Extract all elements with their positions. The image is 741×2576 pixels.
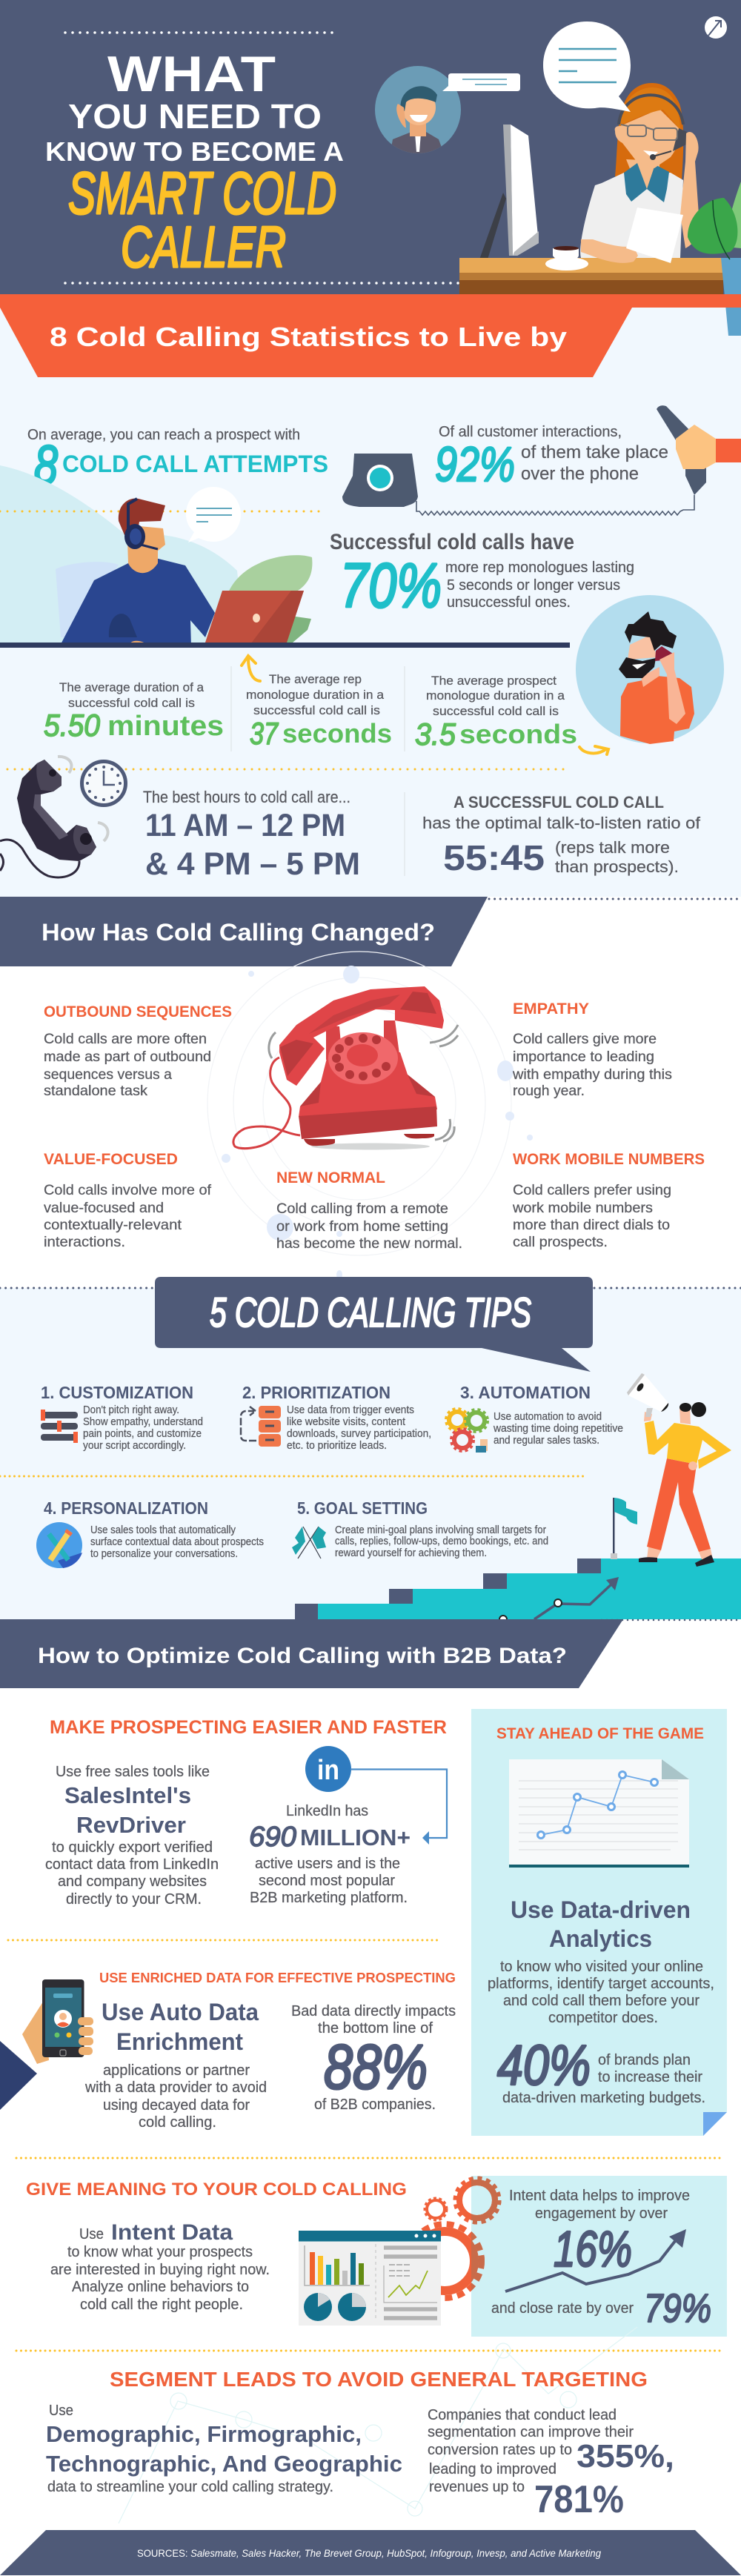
panel: orange heading banner	[0, 294, 741, 377]
panel: stay ahead of the game: and cold call them before your	[503, 1993, 700, 2009]
panel: optimize with B2B data heading	[0, 1619, 623, 1688]
panel: intent data stats: 16%	[554, 2221, 632, 2277]
panel: tip personalization: to personalize your conversations.	[90, 1547, 238, 1560]
panel: empathy: Cold callers give more	[513, 1032, 657, 1047]
panel: rep monologue duration	[246, 672, 392, 751]
panel: intent data stats	[471, 2176, 727, 2337]
panel: stay ahead of the game: to know who visited your online	[500, 1959, 703, 1975]
panel: value-focused	[44, 1151, 212, 1250]
heading: segment leads: SEGMENT LEADS TO AVOID GENERAL TARGETING	[110, 2368, 648, 2391]
icon: black handset with cord	[0, 757, 108, 877]
icon: tools circle	[36, 1522, 82, 1568]
panel: tip customization: 1. CUSTOMIZATION	[41, 1383, 193, 1402]
panel: tip goal setting: 5. GOAL SETTING	[297, 1498, 428, 1518]
panel: empathy: importance to leading	[513, 1049, 654, 1065]
panel: outbound sequences: made as part of outbound	[44, 1049, 211, 1065]
panel: work mobile numbers: WORK MOBILE NUMBERS	[513, 1151, 705, 1168]
panel: statistic 92 percent	[435, 424, 668, 491]
text block: linkedin stat	[249, 1803, 411, 1906]
text block: revdriver: to quickly export verified	[52, 1839, 213, 1856]
panel: new normal: or work from home setting	[276, 1219, 448, 1235]
text block: bad data stat: 88%	[324, 2032, 428, 2102]
arrow: yellow up arrow	[242, 656, 260, 681]
panel: empathy: EMPATHY	[513, 1000, 589, 1018]
decorative desk line	[0, 643, 570, 648]
panel: stay ahead of the game: platforms, identify target accounts,	[488, 1976, 714, 1992]
panel: stay ahead of the game: Analytics	[549, 1925, 652, 1952]
panel: stay ahead of the game: Use Data-driven	[511, 1896, 691, 1923]
text block: segmentation types: data to streamline your cold calling strategy.	[47, 2479, 333, 2495]
text block: bad data stat	[291, 2003, 456, 2113]
panel: empathy	[512, 1000, 672, 1099]
panel: tip customization	[41, 1383, 203, 1452]
panel: tip personalization: Use sales tools that automatically	[90, 1524, 236, 1536]
panel: tip prioritization: etc. to prioritize leads.	[287, 1439, 387, 1452]
panel: rep monologue duration: The average rep	[269, 672, 362, 686]
panel: talk-to-listen ratio: (reps talk more	[555, 838, 670, 857]
panel: statistic 70 percent: 5 seconds or longer versus	[447, 577, 620, 594]
panel: best hours: & 4 PM – 5 PM	[145, 846, 360, 882]
text block: use auto data enrichment: applications or partner	[103, 2062, 250, 2079]
panel: value-focused: VALUE-FOCUSED	[44, 1151, 178, 1168]
panel: statistic reach prospect: COLD CALL ATTEMPTS	[62, 451, 328, 477]
chart: dashboard	[299, 2231, 441, 2326]
panel: statistic 70 percent	[330, 530, 634, 620]
title: KNOW TO BECOME A	[45, 136, 344, 167]
text block: use auto data enrichment: with a data provider to avoid	[84, 2079, 267, 2096]
panel: outbound sequences	[44, 1003, 232, 1099]
arrow: rising line	[505, 2229, 686, 2291]
panel: tip prioritization: Use data from trigger events	[287, 1404, 414, 1416]
text block: use auto data enrichment: USE ENRICHED DATA FOR EFFECTIVE PROSPECTING	[99, 1970, 456, 1985]
text block: use intent data: cold call the right people.	[80, 2297, 243, 2313]
text block: revdriver: contact data from LinkedIn	[45, 1856, 219, 1873]
text block: revdriver	[45, 1764, 219, 1908]
panel: value-focused: contextually-relevant	[44, 1218, 182, 1233]
text block: linkedin stat: second most popular	[259, 1873, 395, 1889]
icon: man with headset at laptop	[0, 465, 322, 647]
panel: rep monologue duration: 37	[250, 716, 279, 751]
panel: outbound sequences: OUTBOUND SEQUENCES	[44, 1003, 232, 1020]
panel: average call duration: 5.50	[44, 708, 101, 743]
panel: footer sources	[0, 2530, 741, 2575]
arrow: linkedin connector	[350, 1770, 447, 1845]
panel: work mobile numbers: work mobile numbers	[512, 1201, 653, 1216]
icon: potted plant	[688, 182, 741, 336]
text block: use intent data: to know what your prospects	[67, 2244, 253, 2260]
panel: work mobile numbers	[512, 1151, 705, 1250]
icon: gears	[446, 1409, 488, 1453]
text block: segmentation types	[46, 2403, 402, 2495]
icon: hand holding handset	[657, 405, 741, 495]
panel: statistic 92 percent: of them take place	[521, 442, 668, 462]
icon: woman with headset	[580, 83, 699, 263]
icon: crossed flags	[292, 1527, 326, 1558]
title: YOU NEED TO	[68, 97, 322, 136]
panel: statistic 70 percent: unsuccessful ones.	[447, 594, 571, 611]
panel: tip customization: Show empathy, understand	[83, 1415, 203, 1428]
panel: tip prioritization: like website visits, content	[287, 1415, 406, 1428]
panel: value-focused: value-focused and	[44, 1201, 164, 1216]
panel: average call duration: successful cold call is	[68, 696, 195, 710]
panel: tip personalization: 4. PERSONALIZATION	[44, 1498, 208, 1518]
text block: use intent data: Intent Data	[111, 2220, 233, 2245]
panel: tip automation	[460, 1383, 623, 1447]
text block: use auto data enrichment: Use Auto Data	[102, 1999, 259, 2025]
panel: best hours: The best hours to cold call are...	[143, 788, 350, 806]
panel: prospect monologue duration: monologue duration in a	[426, 688, 565, 703]
text block: use auto data enrichment: cold calling.	[139, 2114, 216, 2131]
text block: linkedin stat: active users and is the	[255, 1856, 400, 1872]
panel: statistic 70 percent: Successful cold calls have	[330, 530, 574, 554]
panel: prospect monologue duration: successful cold call is	[433, 704, 559, 718]
panel: statistic reach prospect	[27, 427, 328, 496]
panel: intent data stats: engagement by over	[535, 2205, 668, 2222]
panel: optimize with B2B data heading: How to Optimize Cold Calling with B2B Data?	[38, 1644, 567, 1668]
text block: segmentation stats: revenues up to	[429, 2479, 525, 2495]
icon: linkedin: in	[317, 1755, 339, 1786]
text block: revdriver: directly to your CRM.	[66, 1891, 202, 1908]
panel: prospect monologue duration: 3.5	[415, 717, 456, 751]
panel: rep monologue duration: successful cold call is	[253, 703, 380, 717]
panel: stay ahead of the game: 40%	[497, 2034, 591, 2097]
panel: stay ahead of the game: competitor does.	[548, 2010, 658, 2026]
panel: new normal	[276, 1169, 462, 1252]
icon: flag	[611, 1498, 637, 1559]
panel: empathy: with empathy during this	[512, 1067, 672, 1083]
panel: new normal: has become the new normal.	[276, 1236, 462, 1252]
icon: orange gears	[408, 2178, 499, 2298]
icon: woman with megaphone	[627, 1373, 731, 1567]
panel: tip goal setting	[297, 1498, 548, 1559]
panel: statistic 70 percent: more rep monologues lasting	[445, 560, 634, 576]
callout: 5 cold calling tips heading: 5 COLD CALLING TIPS	[210, 1289, 531, 1335]
panel: how has cold calling changed heading: How Has Cold Calling Changed?	[41, 919, 435, 946]
panel: empathy: rough year.	[513, 1083, 585, 1099]
panel: intent data stats: Intent data helps to improve	[509, 2188, 690, 2204]
panel: average call duration: The average duration of a	[59, 680, 205, 694]
panel: rep monologue duration: monologue duration in a	[246, 688, 385, 702]
text block: linkedin stat: LinkedIn has	[286, 1803, 368, 1819]
text block: revdriver: Use free sales tools like	[56, 1764, 210, 1780]
panel: intent data stats: 79%	[644, 2286, 711, 2331]
panel: tip customization: your script accordingly.	[83, 1439, 186, 1452]
panel: tip customization: Don't pitch right away.	[83, 1404, 179, 1416]
text block: use intent data: Use	[79, 2226, 104, 2243]
icon: coffee cup	[545, 246, 588, 270]
text block: segmentation types: Use	[49, 2403, 73, 2419]
panel: prospect monologue duration: The average prospect	[431, 674, 556, 688]
panel: tip automation: 3. AUTOMATION	[460, 1383, 591, 1402]
heading: give meaning: GIVE MEANING TO YOUR COLD CALLING	[26, 2180, 407, 2200]
title: WHAT	[107, 46, 276, 102]
panel: new normal: Cold calling from a remote	[276, 1201, 448, 1217]
panel: average call duration: minutes	[107, 711, 224, 742]
text block: use intent data: are interested in buying right now.	[50, 2262, 270, 2278]
panel: stay ahead of the game: to increase their	[598, 2069, 702, 2085]
panel: tip prioritization	[242, 1383, 431, 1452]
panel: header background	[0, 0, 741, 294]
panel: talk-to-listen ratio: A SUCCESSFUL COLD CALL	[453, 793, 664, 811]
panel: tip goal setting: reward yourself for achieving them.	[335, 1547, 487, 1559]
panel: tip prioritization: downloads, survey participation,	[287, 1427, 431, 1440]
panel: outbound sequences: Cold calls are more often	[44, 1032, 207, 1047]
text block: use auto data enrichment: Enrichment	[116, 2028, 243, 2055]
panel: tip customization: pain points, and customize	[83, 1427, 202, 1440]
panel: tip personalization: surface contextual data about prospects	[90, 1536, 264, 1548]
panel: statistic 92 percent: over the phone	[521, 464, 639, 484]
panel: tip goal setting: calls, replies, follow-ups, demo bookings, etc. and	[335, 1535, 548, 1547]
callout: speech bubble laptop man	[186, 487, 241, 542]
panel: new normal: NEW NORMAL	[276, 1169, 385, 1186]
chart: line on paper	[509, 1759, 689, 1868]
panel: tip automation: wasting time doing repetitive	[493, 1422, 623, 1435]
text block: segmentation types: Demographic, Firmographic,	[46, 2421, 362, 2447]
panel: talk-to-listen ratio: has the optimal talk-to-listen ratio of	[422, 814, 701, 832]
panel: statistic 92 percent: 92%	[435, 436, 515, 491]
text block: segmentation stats: 355%,	[576, 2438, 674, 2474]
panel: prospect monologue duration	[415, 674, 577, 751]
panel: stay ahead of the game: STAY AHEAD OF THE GAME	[496, 1725, 704, 1742]
panel: tip automation: Use automation to avoid	[494, 1410, 602, 1423]
panel: outbound sequences: sequences versus a	[44, 1067, 172, 1083]
icon: bearded man on phone	[576, 595, 724, 744]
icon: office telephone with cord	[342, 454, 694, 515]
icon: clock	[82, 762, 126, 805]
text block: revdriver: RevDriver	[76, 1812, 186, 1838]
icon: computer monitor	[479, 125, 539, 270]
icon: man on phone avatar	[375, 66, 461, 156]
text block: segmentation stats: segmentation can improve their	[428, 2424, 634, 2440]
icon: priority list	[241, 1406, 281, 1447]
text block: segmentation stats	[428, 2407, 674, 2521]
title	[45, 46, 344, 279]
icon: stairs with rising chart	[295, 1558, 741, 1623]
icon: red rotary telephone	[233, 986, 458, 1150]
title: CALLER	[121, 214, 286, 279]
panel: stay ahead of the game	[471, 1709, 727, 2136]
panel: work mobile numbers: call prospects.	[513, 1235, 608, 1250]
text block: linkedin stat: B2B marketing platform.	[250, 1890, 408, 1906]
text block: revdriver: and company websites	[58, 1873, 207, 1890]
panel: statistic reach prospect: On average, you can reach a prospect with	[27, 427, 300, 443]
panel: tip automation: and regular sales tasks.	[494, 1434, 599, 1447]
panel: footer sources: SOURCES: Salesmate, Sales Hacker, The Brevet Group, HubSpot, Infogroup, Invesp, and Active Marketing	[137, 2547, 601, 2559]
panel: tip personalization	[44, 1498, 264, 1560]
panel: work mobile numbers: more than direct dials to	[513, 1218, 670, 1233]
panel: work mobile numbers: Cold callers prefer using	[513, 1183, 671, 1198]
panel: prospect monologue duration: seconds	[459, 719, 577, 749]
text block: segmentation stats: 781%	[534, 2478, 624, 2521]
text block: use intent data: Analyze online behaviors to	[72, 2279, 249, 2295]
panel: value-focused: interactions.	[44, 1235, 125, 1250]
panel: rep monologue duration: seconds	[282, 718, 392, 748]
icon: hand holding smartphone	[0, 1979, 93, 2110]
heading: make prospecting easier: MAKE PROSPECTING EASIER AND FASTER	[50, 1717, 447, 1738]
text block: bad data stat: the bottom line of	[318, 2020, 433, 2036]
panel: how has cold calling changed heading	[0, 897, 488, 966]
callout: small speech bubble	[442, 73, 520, 91]
text block: segmentation stats: conversion rates up to	[428, 2442, 572, 2458]
arrow: yellow right arrow	[579, 746, 608, 754]
panel: best hours	[143, 788, 360, 882]
callout: big speech bubble	[543, 21, 631, 112]
callout: 5 cold calling tips heading	[155, 1277, 593, 1372]
panel: outbound sequences: standalone task	[44, 1083, 148, 1099]
icon: sliders	[41, 1410, 78, 1443]
text block: bad data stat: Bad data directly impacts	[291, 2003, 456, 2019]
text block: segmentation stats: Companies that conduct lead	[428, 2407, 617, 2423]
icon: desk	[459, 258, 723, 294]
panel: talk-to-listen ratio: than prospects).	[555, 857, 679, 876]
panel: tip prioritization: 2. PRIORITIZATION	[242, 1383, 391, 1402]
panel: stay ahead of the game: data-driven marketing budgets.	[502, 2090, 705, 2106]
panel: intent data stats: and close rate by over	[491, 2300, 634, 2317]
panel: stay ahead of the game: of brands plan	[598, 2052, 691, 2068]
title: SMART COLD	[68, 160, 336, 226]
panel: statistic reach prospect: 8	[34, 434, 58, 496]
panel: best hours: 11 AM – 12 PM	[145, 808, 345, 843]
panel: statistic 92 percent: Of all customer interactions,	[439, 424, 622, 440]
text block: use auto data enrichment	[84, 1970, 456, 2131]
text block: use intent data	[50, 2220, 270, 2313]
panel: talk-to-listen ratio: 55:45	[443, 839, 545, 878]
panel: average call duration	[44, 680, 224, 743]
panel: value-focused: Cold calls involve more of	[44, 1183, 212, 1198]
text block: bad data stat: of B2B companies.	[314, 2097, 436, 2113]
panel: orange heading banner: 8 Cold Calling Statistics to Live by	[50, 322, 567, 352]
panel: tip goal setting: Create mini-goal plans involving small targets for	[335, 1524, 546, 1536]
panel: statistic 70 percent: 70%	[340, 551, 442, 620]
text block: linkedin stat: 690	[249, 1822, 296, 1853]
panel: talk-to-listen ratio	[422, 793, 701, 878]
icon: logo	[705, 16, 727, 39]
text block: use auto data enrichment: using decayed data for	[103, 2097, 250, 2114]
text block: revdriver: SalesIntel's	[64, 1782, 191, 1808]
icon: linkedin	[305, 1746, 351, 1792]
decorative column separators	[231, 666, 405, 876]
text block: segmentation stats: leading to improved	[429, 2461, 556, 2477]
text block: segmentation types: Technographic, And Geographic	[46, 2451, 402, 2477]
text block: linkedin stat: MILLION+	[300, 1825, 411, 1850]
